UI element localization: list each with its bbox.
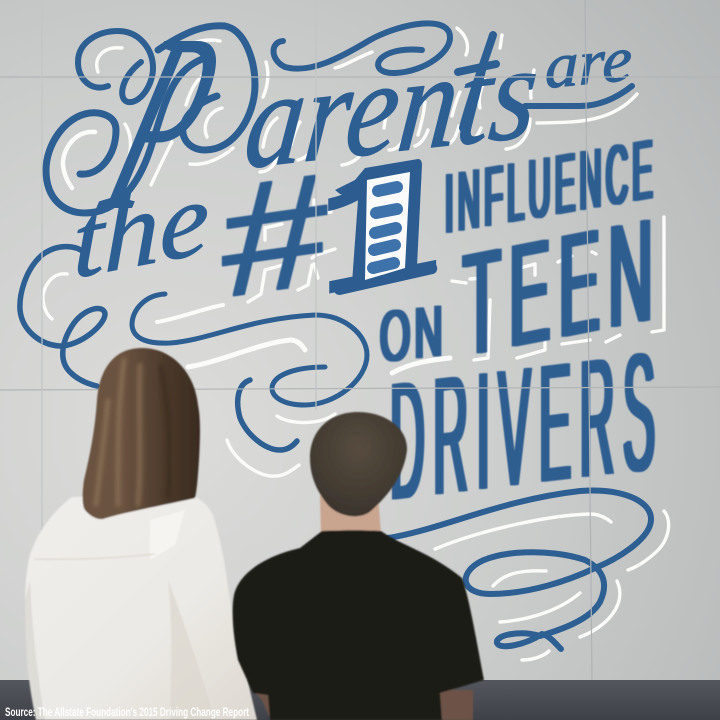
heading word: Parents: arents bbox=[239, 15, 545, 198]
numeral 1 with list window icon: 1 bbox=[312, 126, 447, 350]
word: TEEN: TEEN bbox=[463, 186, 661, 387]
word: ON: ON bbox=[380, 291, 447, 378]
heading word: Parents bbox=[78, 0, 545, 264]
word: DRIVERS: DRIVERS bbox=[390, 317, 664, 537]
white highlight strokes behind the lettering bbox=[43, 28, 669, 660]
source caption: Source: The Allstate Foundation's 2015 Driving Change Report bbox=[5, 707, 249, 719]
person: teen son seen from behind bbox=[233, 412, 484, 720]
flourish strokes bbox=[20, 23, 651, 649]
floor bbox=[0, 680, 720, 720]
heading word: the: the bbox=[73, 157, 209, 301]
word: INFLUENCE: INFLUENCE bbox=[445, 122, 657, 252]
person: mother seen from behind bbox=[25, 348, 257, 720]
number sign: # bbox=[222, 140, 327, 331]
heading word: are: are bbox=[545, 23, 632, 103]
